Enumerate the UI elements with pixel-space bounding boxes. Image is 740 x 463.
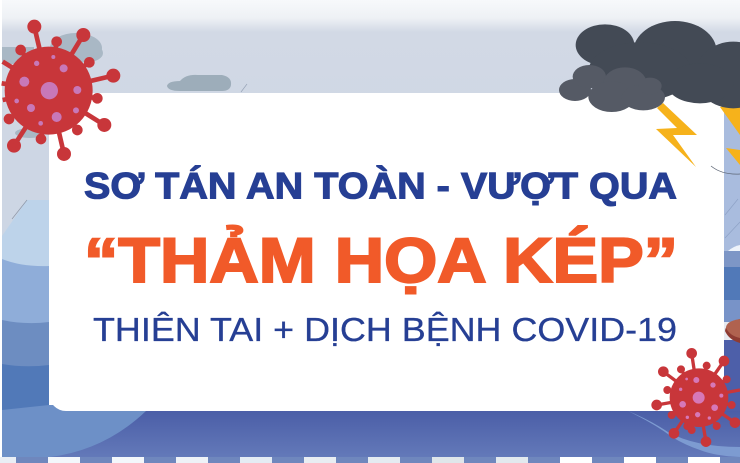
storm cloud light xyxy=(559,65,665,112)
title line 3: THIÊN TAI + DỊCH BỆNH COVID-19 xyxy=(93,312,677,349)
white title card xyxy=(49,93,724,411)
title line 2: “THẢM HỌA KÉP” xyxy=(84,225,678,296)
bottom road markings xyxy=(0,457,740,463)
title line 1: SƠ TÁN AN TOÀN - VƯỢT QUA xyxy=(84,166,677,206)
virus large top left xyxy=(2,22,118,159)
virus small bottom right xyxy=(653,350,740,445)
lightning bolts xyxy=(656,102,740,167)
thin cable arc xyxy=(711,166,740,174)
storm cloud dark xyxy=(576,21,740,108)
sky clouds xyxy=(2,33,231,138)
